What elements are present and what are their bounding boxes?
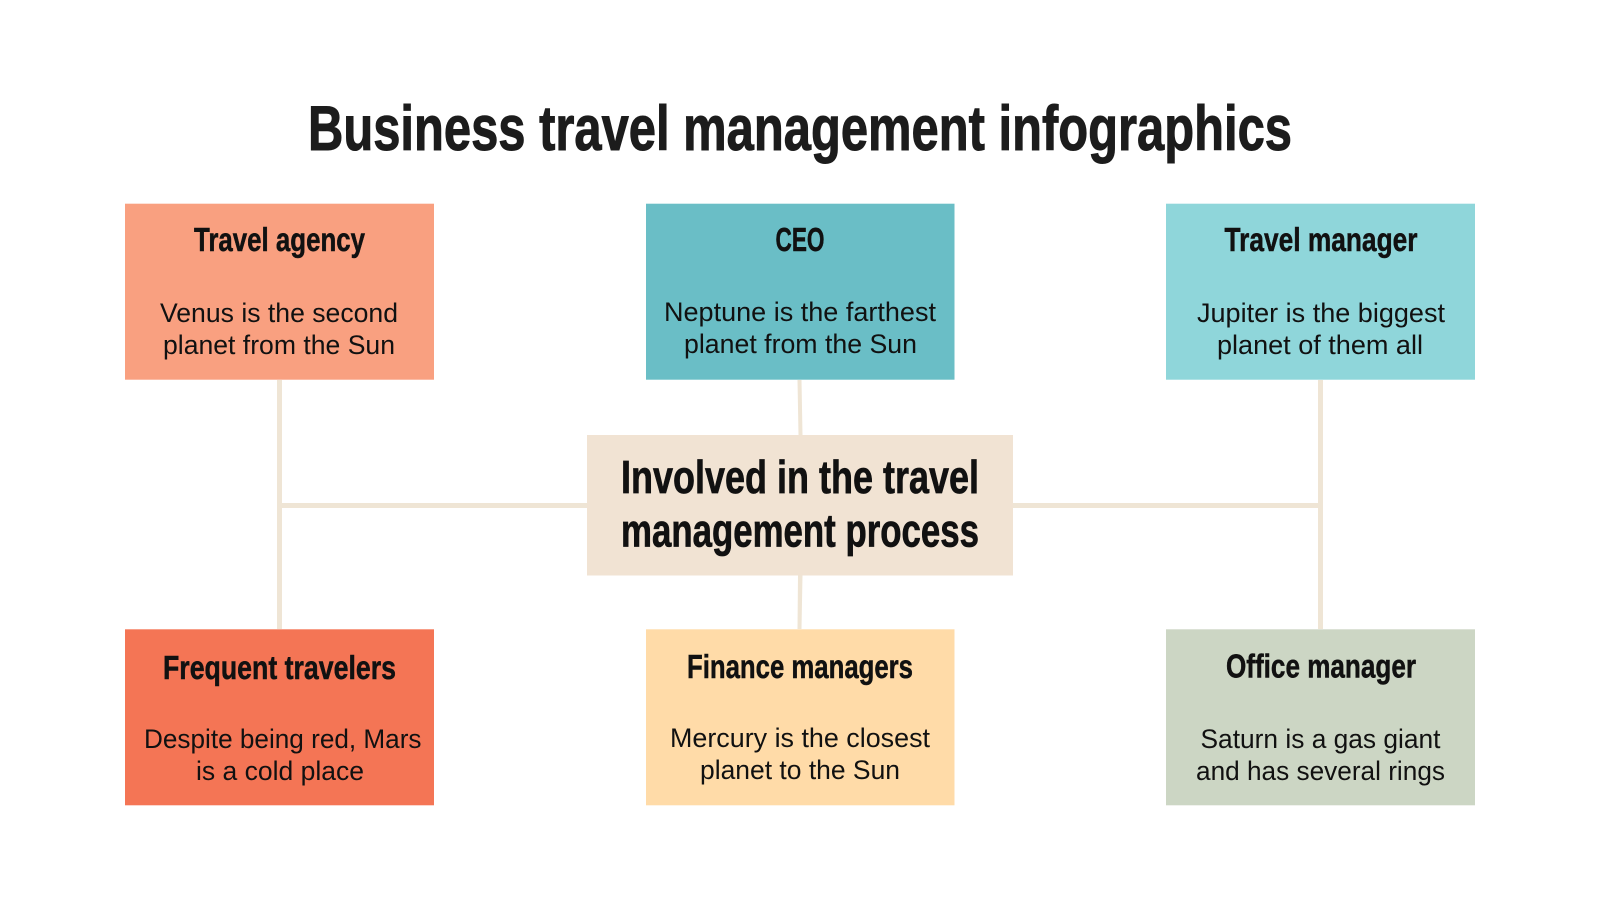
panel: finance managers: Mercury is the closest (670, 723, 930, 753)
panel: frequent travelers: Despite being red, Mars (144, 724, 422, 754)
panel: finance managers: planet to the Sun (700, 755, 900, 785)
panel: finance managers: Finance managers (687, 648, 913, 685)
panel: travel manager (1166, 204, 1475, 380)
panel: office manager: Saturn is a gas giant (1200, 724, 1441, 754)
panel: office manager (1166, 629, 1475, 805)
panel: central topic: Involved in the travel (621, 451, 979, 503)
panel: CEO: CEO (776, 221, 824, 258)
panel: frequent travelers: Frequent travelers (163, 649, 396, 686)
panel: CEO: Neptune is the farthest (664, 297, 936, 327)
panel: travel agency (125, 204, 434, 380)
panel: frequent travelers: is a cold place (196, 756, 364, 786)
panel: central topic (587, 435, 1013, 576)
title: Business travel management infographics (308, 94, 1292, 164)
panel: travel manager: planet of them all (1217, 330, 1423, 360)
panel: finance managers (646, 629, 954, 805)
panel: travel manager: Travel manager (1224, 221, 1418, 258)
panel: office manager: Office manager (1226, 648, 1416, 684)
panel: CEO: planet from the Sun (684, 329, 917, 359)
panel: CEO (646, 204, 954, 380)
panel: travel agency: planet from the Sun (163, 330, 395, 360)
panel: travel agency: Venus is the second (160, 298, 398, 328)
panel: travel manager: Jupiter is the biggest (1197, 298, 1445, 328)
panel: frequent travelers (125, 629, 434, 805)
panel: office manager: and has several rings (1196, 756, 1445, 786)
panel: travel agency: Travel agency (194, 221, 365, 258)
panel: central topic: management process (621, 504, 979, 556)
connector lines (277, 380, 1323, 629)
